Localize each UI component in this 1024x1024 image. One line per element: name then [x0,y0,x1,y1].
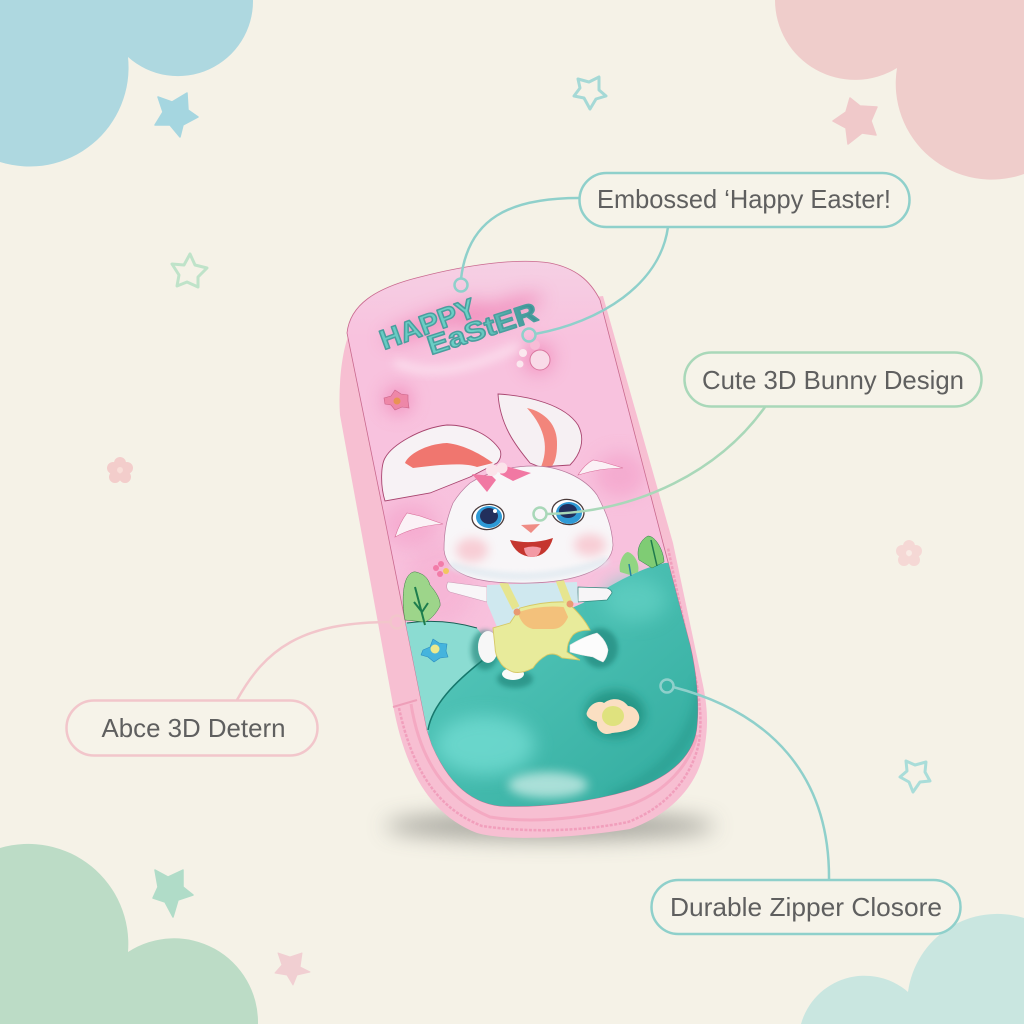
main teal mound [428,562,698,806]
bunny foot bottom [502,668,524,680]
callout: Embossed Happy Easter: Embossed ‘Happy Easter! [597,184,891,214]
cloud: top right pink [775,0,1024,180]
callout line: zipper [660,680,829,880]
bunny ear inner: folded [405,443,493,468]
tree: right small [620,552,638,576]
star: pink filled [833,98,877,144]
bunny pocket [519,608,567,628]
zipper inner stitching [411,704,697,820]
upper right lighter teal [603,578,667,622]
callout line: lettering detail [522,227,668,342]
star: green filled [153,870,193,917]
bunny bow [472,462,531,492]
bunny straps [503,576,568,608]
icon: large flower [585,690,645,738]
case side and zipper [340,296,707,838]
bunny ear: folded [382,425,501,501]
bunny tongue [524,546,541,557]
callout: Durable Zipper Closore: Durable Zipper Closore [670,892,942,922]
bottom-right dark edge [610,680,703,798]
bunny [382,394,623,680]
star: blue filled [155,93,198,137]
paw flowers [433,561,449,577]
bunny arm left [447,582,487,602]
icon: flower right [896,540,922,566]
star: teal outline top [574,77,606,109]
tree: right large [638,536,664,568]
bunny foot right [570,633,608,662]
callout: Durable Zipper Closore [652,880,960,934]
bunny chin shade [450,560,608,576]
zipper seam [393,700,417,707]
overalls buttons [514,600,574,616]
callout: Abce 3D Detern [66,700,318,756]
ground shadow [385,812,715,840]
hill crease [428,660,483,730]
callout line: bunny [534,407,765,520]
callout: Embossed Happy Easter [580,173,910,227]
clouds on case [395,460,623,537]
mound highlight [435,715,535,775]
cloud: top left blue [0,0,253,167]
icon: blue flower [421,639,448,662]
cloud: bottom left green [0,844,258,1024]
bunny nose [521,524,540,533]
hill ridge [407,621,477,628]
star: green outline [172,254,207,287]
star: pink filled lower [275,953,310,985]
icon: flower left [107,457,133,483]
callout line: left [237,616,404,700]
bunny arm right [578,587,612,602]
bunny ear inner: upright [527,408,557,467]
pink embossed glow [380,287,553,414]
bunny cheeks [456,534,606,562]
cloud: bottom right mint [801,914,1024,1024]
icon: embossed pink flower [384,390,409,410]
icon: embossed paw [516,340,550,370]
bunny ear: upright [498,394,582,467]
bunny foot left [478,631,498,663]
bunny eye right [550,497,586,527]
bunny overalls [493,602,590,672]
embossed text: Happy Easter: HAPPY [375,292,480,356]
left green hill [406,622,482,760]
bunny mouth [510,538,553,557]
shadow under feet [471,628,618,688]
embossed text: Happy Easter [375,292,541,361]
bunny eye left [470,502,506,532]
bunny shirt [487,582,578,627]
bunny head [444,466,613,583]
white bottom sheen [508,772,588,798]
case face [347,261,698,806]
callout: Cute 3D Bunny Design [684,352,982,406]
callout line: embossed text [454,198,579,292]
embossed text: Happy Easter: EaStER [424,297,541,361]
callout: Abce 3D Detern: Abce 3D Detern [102,713,286,743]
tree: left [403,572,440,625]
zipper outer stitching [399,548,700,830]
callout: Cute 3D Bunny Design: Cute 3D Bunny Design [702,365,964,395]
star: teal outline lower [900,761,930,792]
pink shade behind bunny [414,551,468,618]
highlight under text [395,345,520,370]
pencil case [340,261,720,838]
